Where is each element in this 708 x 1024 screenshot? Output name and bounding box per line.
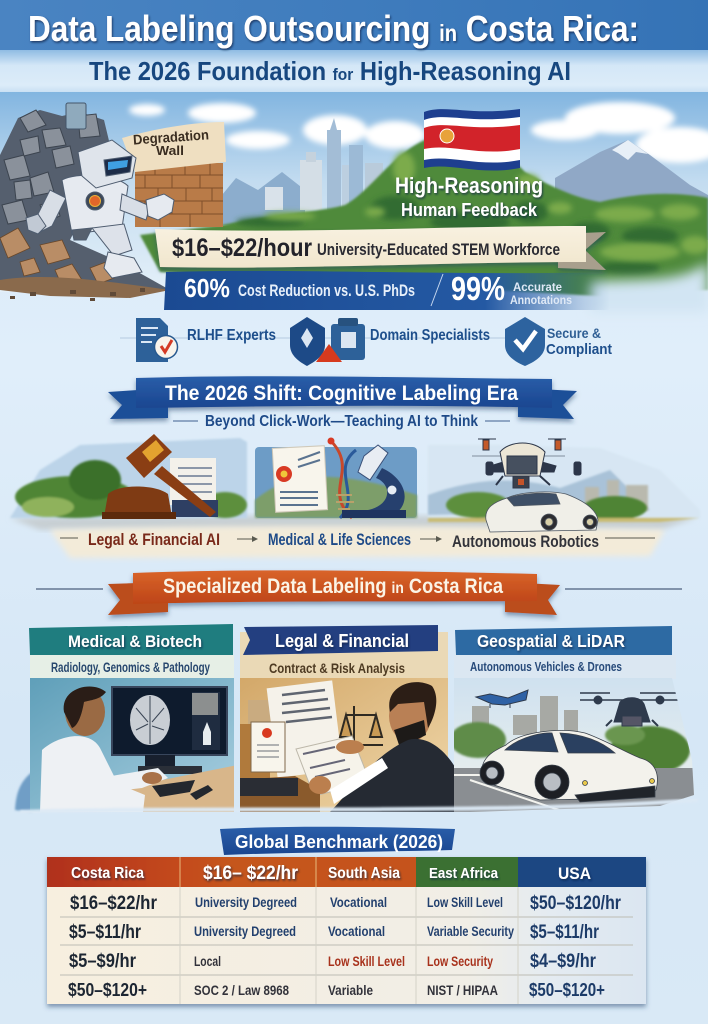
- table header: USA: [558, 864, 591, 883]
- comparison table: [47, 857, 646, 1004]
- table row 1: $50–$120/hr: [530, 893, 621, 914]
- table row 2: Variable Security: [427, 923, 514, 939]
- sector label strip: Medical & Life Sciences: [268, 530, 411, 549]
- section: cognitive labeling era: [10, 376, 700, 558]
- table row 3: $4–$9/hr: [530, 951, 597, 972]
- orange ribbon heading: [108, 570, 560, 615]
- stat: accuracy: Annotations: [510, 293, 572, 307]
- sector label strip: Autonomous Robotics: [452, 532, 599, 551]
- orange ribbon heading: Specialized Data Labeling in Costa Rica: [163, 575, 503, 598]
- table row 4: [68, 980, 605, 1000]
- secure label: Compliant: [546, 341, 612, 358]
- table row 3: [69, 951, 597, 972]
- legal scene: [235, 678, 470, 812]
- car body: [480, 730, 657, 802]
- table row 1: University Degreed: [195, 894, 297, 910]
- table row 4: Variable: [328, 982, 373, 998]
- table row 2: $5–$11/hr: [69, 922, 141, 943]
- mountains: [222, 140, 708, 240]
- table row 2: [69, 922, 599, 943]
- panel: geospatial and lidar: [20, 626, 698, 812]
- rubble: [0, 103, 170, 301]
- table row 3: Local: [194, 953, 221, 969]
- panel: geospatial and lidar: Geospatial & LiDAR: [477, 631, 625, 651]
- blue ribbon heading: [108, 376, 577, 419]
- domain label: Domain Specialists: [370, 327, 490, 344]
- table row 1: $16–$22/hr: [70, 893, 158, 914]
- table row 4: SOC 2 / Law 8968: [194, 982, 289, 998]
- trees: [140, 137, 708, 312]
- drones: [476, 690, 680, 726]
- card: legal gavel: [10, 434, 247, 519]
- stat: cost reduction: [184, 273, 415, 303]
- wall sign: Wall: [156, 143, 184, 158]
- wall sign: Degradation: [132, 126, 209, 148]
- secure label: Secure &: [547, 325, 601, 341]
- panel: medical and biotech: Medical & Biotech: [68, 632, 202, 651]
- table row 4: $50–$120+: [68, 980, 147, 1000]
- stat: cost reduction: Cost Reduction vs. U.S. PhDs: [238, 281, 415, 300]
- icon: RLHF document: [136, 318, 178, 362]
- table row 2: Vocational: [328, 923, 385, 939]
- price ribbon: $16–$22/hour: [172, 234, 312, 262]
- table row 3: Low Skill Level: [328, 953, 405, 969]
- table row 3: $5–$9/hr: [69, 951, 137, 972]
- panel: legal and financial: Contract & Risk Analysis: [269, 660, 405, 676]
- table header: Costa Rica: [71, 865, 144, 882]
- high-reasoning label: High-Reasoning: [395, 173, 543, 198]
- table row 1: [70, 893, 621, 914]
- stat: cost reduction: 60%: [184, 273, 230, 303]
- panel: geospatial and lidar: Autonomous Vehicles & Drones: [470, 659, 622, 674]
- sector label strip: Legal & Financial AI: [88, 530, 220, 549]
- title: Data Labeling Outsourcing in Costa Rica:: [28, 8, 639, 49]
- table row 1: Low Skill Level: [427, 894, 503, 910]
- table row 4: NIST / HIPAA: [427, 982, 498, 998]
- table row 1: Vocational: [330, 894, 387, 910]
- wall sign: [132, 126, 209, 158]
- ribbon subheading: Beyond Click-Work—Teaching AI to Think: [205, 413, 478, 430]
- header block: [0, 0, 708, 94]
- stat: accuracy: [451, 270, 572, 307]
- geospatial scene: [450, 678, 694, 812]
- hero scene: [0, 92, 708, 312]
- panel: medical and biotech: [29, 624, 238, 812]
- city skyline: [265, 118, 383, 210]
- medical scene: [30, 678, 238, 812]
- benchmark section: [47, 827, 660, 1004]
- panel: medical and biotech: Radiology, Genomics & Pathology: [51, 660, 210, 675]
- RLHF label: RLHF Experts: [187, 327, 276, 344]
- secure label: [546, 325, 612, 358]
- high-reasoning label: [395, 173, 543, 220]
- table header: $16– $22/hr: [203, 863, 299, 884]
- feature row: [120, 317, 612, 366]
- panel: legal and financial: [235, 625, 470, 812]
- panel: legal and financial: Legal & Financial: [275, 631, 409, 651]
- card: drone and car: [428, 439, 700, 532]
- Costa Rica flag: [424, 109, 520, 171]
- table header: South Asia: [328, 865, 400, 882]
- sky: [0, 92, 708, 292]
- price ribbon: [155, 226, 606, 270]
- benchmark tab heading: [220, 827, 455, 855]
- table row 4: $50–$120+: [529, 980, 605, 1000]
- card: medical dna: [255, 438, 417, 518]
- price ribbon: University-Educated STEM Workforce: [317, 240, 560, 259]
- drone: [472, 439, 581, 488]
- table row 3: Low Security: [427, 953, 493, 969]
- stat: accuracy: Accurate: [513, 280, 562, 294]
- benchmark tab heading: Global Benchmark (2026): [235, 832, 443, 852]
- subtitle: The 2026 Foundation for High-Reasoning AI: [89, 56, 571, 86]
- stats band: [164, 270, 610, 310]
- panels block: [15, 624, 698, 812]
- section: specialized data labeling: [36, 570, 682, 615]
- sector label strip: [10, 516, 696, 558]
- table row 2: University Degreed: [194, 923, 296, 939]
- robot: [26, 140, 174, 278]
- car: [486, 492, 598, 532]
- icon: secure shield: [505, 317, 545, 366]
- table header: [47, 857, 646, 887]
- table row 2: $5–$11/hr: [530, 922, 599, 943]
- table header: East Africa: [429, 865, 499, 882]
- icon: domain specialists: [290, 317, 365, 366]
- high-reasoning label: Human Feedback: [401, 200, 538, 220]
- clouds: [129, 102, 708, 163]
- blue ribbon heading: The 2026 Shift: Cognitive Labeling Era: [165, 382, 518, 405]
- degradation wall: [122, 122, 226, 227]
- stat: accuracy: 99%: [451, 270, 505, 307]
